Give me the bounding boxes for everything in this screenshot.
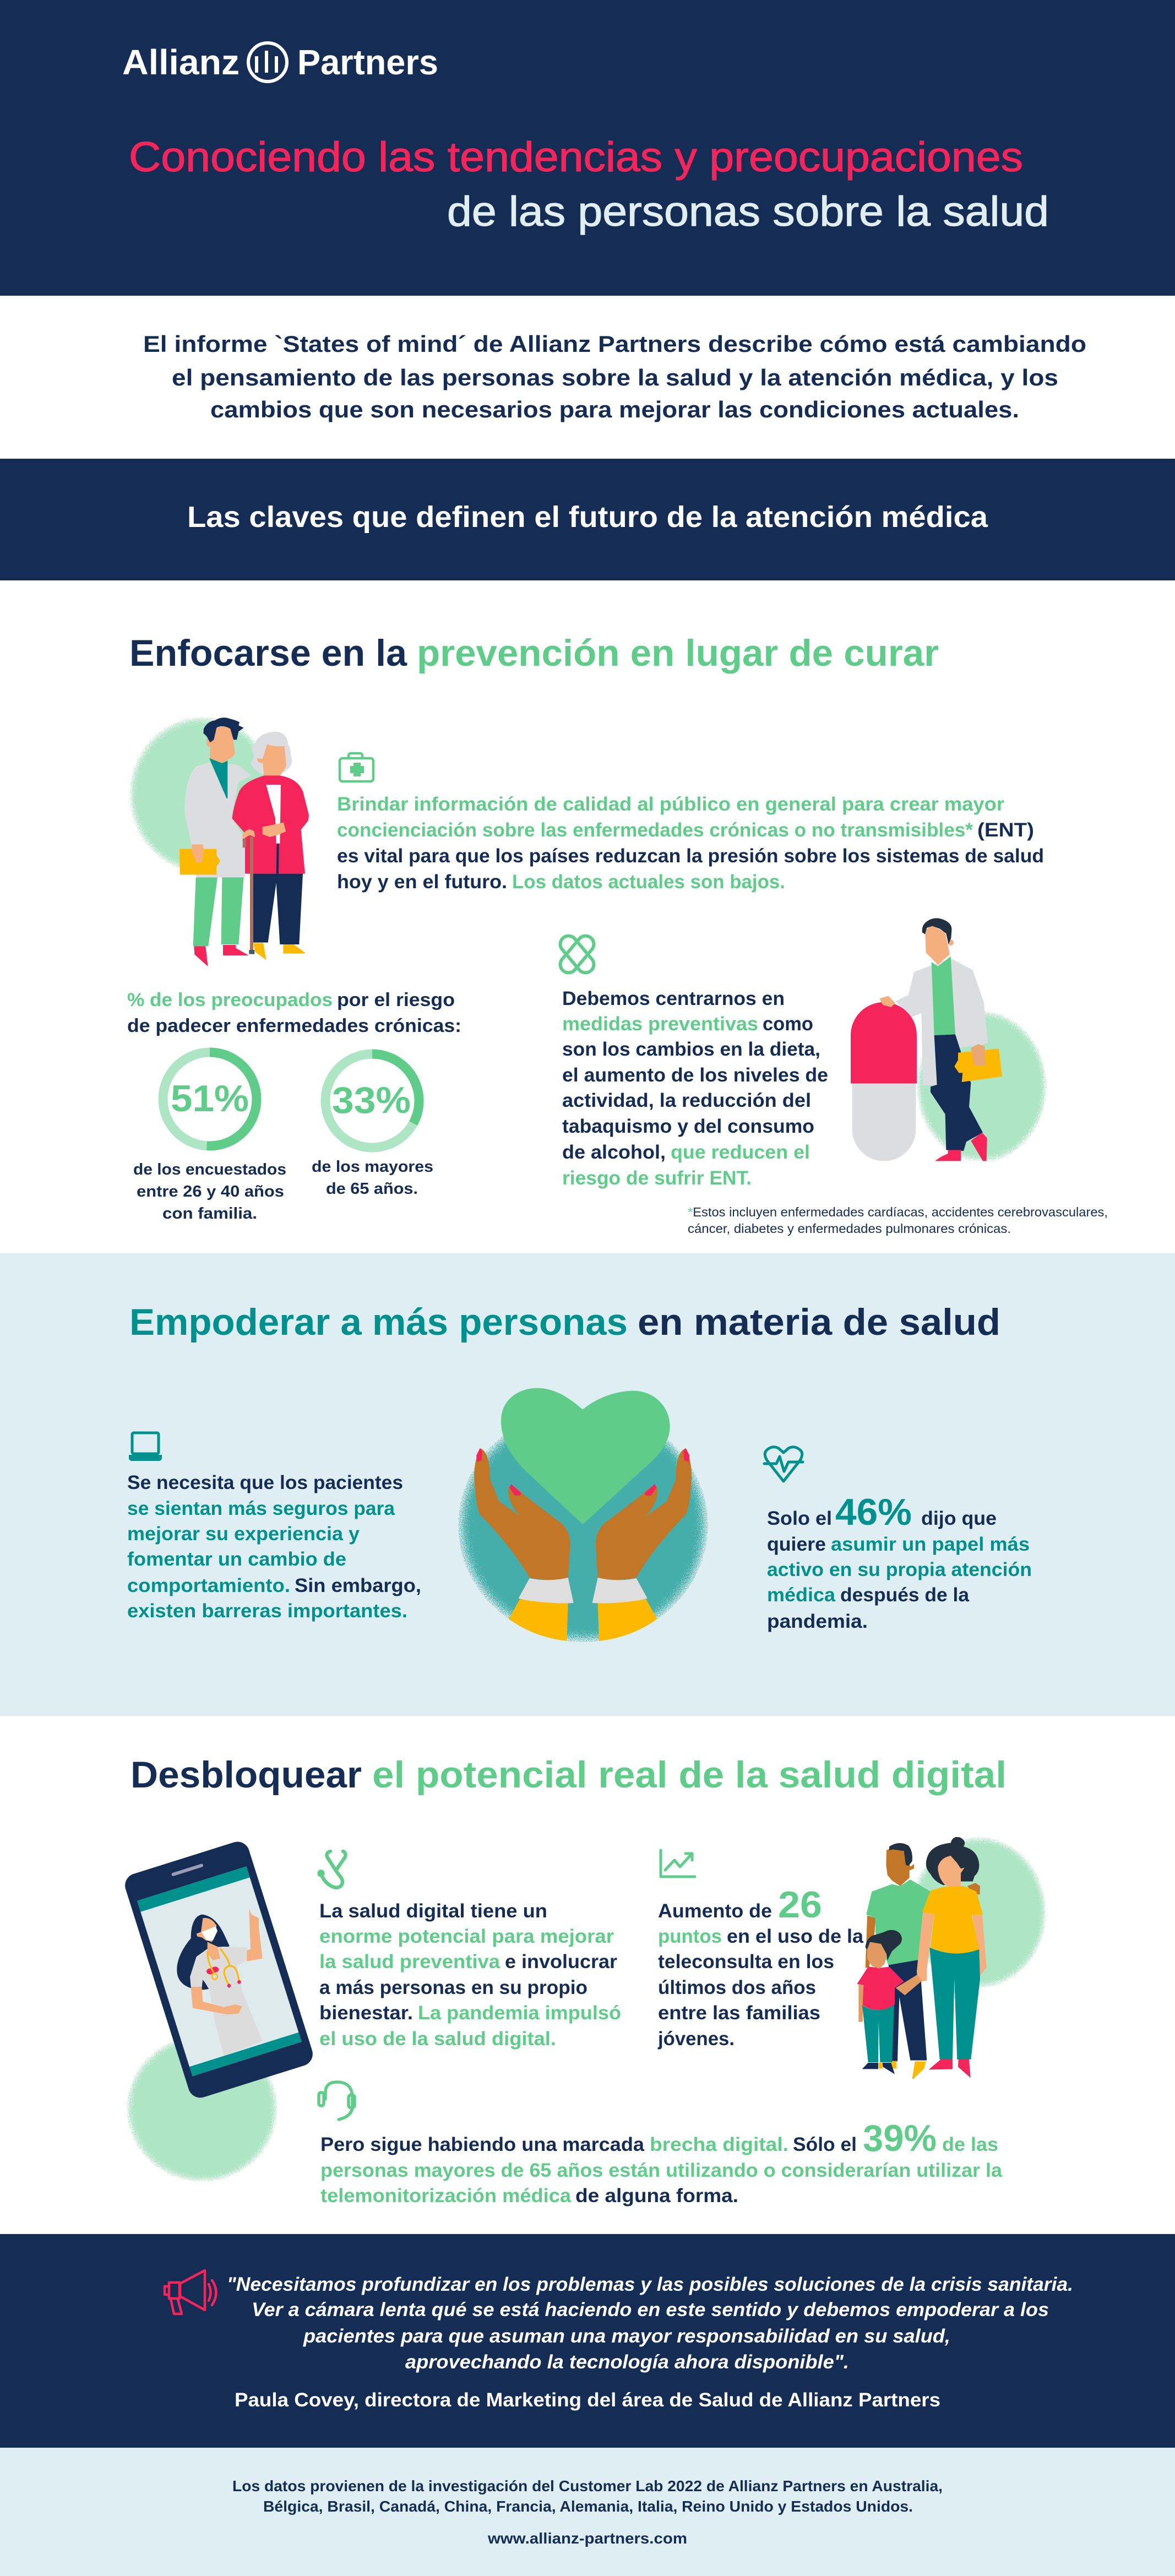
intro paragraph: cambios que son necesarios para mejorar las condiciones actuales. bbox=[210, 396, 1019, 422]
heading: prevención en lugar de curar bbox=[417, 632, 939, 674]
label: over 65: de 65 años. bbox=[326, 1180, 418, 1198]
text: digital health potential: la salud preventiva bbox=[319, 1951, 501, 1972]
text: 46 percent: asumir un papel más bbox=[831, 1534, 1030, 1555]
heading bbox=[129, 1301, 1000, 1343]
text: 46 percent: activo en su propia atención bbox=[767, 1559, 1032, 1580]
text: 26 points: 26 bbox=[778, 1884, 822, 1926]
text: patients confidence bbox=[127, 1472, 421, 1622]
text: 46 percent: médica bbox=[767, 1584, 836, 1606]
panel: footer bbox=[0, 2448, 1175, 2576]
heading: Empoderar a más personas bbox=[129, 1301, 628, 1343]
text: patients confidence: Sin embargo, bbox=[295, 1575, 421, 1596]
text: public information: es vital para que los países reduzcan la presión sobre los sistemas de salud bbox=[337, 845, 1044, 867]
quote text: pacientes para que asuman una mayor responsabilidad en su salud, bbox=[303, 2325, 950, 2347]
text: public information: Brindar información de calidad al público en general para crear mayor bbox=[337, 794, 1004, 815]
text: public information: hoy y en el futuro. bbox=[337, 871, 507, 893]
title bbox=[129, 134, 1049, 235]
footnote: *Estos incluyen enfermedades cardíacas, accidentes cerebrovasculares, bbox=[688, 1205, 1108, 1219]
label: 26 to 40 with family: de los encuestados bbox=[133, 1161, 286, 1178]
text: 46 percent: 46% bbox=[835, 1491, 912, 1533]
text: digital gap: brecha digital. bbox=[650, 2134, 788, 2155]
panel: quote bbox=[0, 2234, 1175, 2448]
text: preventive measures: riesgo de sufrir ENT. bbox=[562, 1167, 752, 1189]
text: preventive measures: que reducen el bbox=[671, 1142, 810, 1163]
label: 26 to 40 with family: entre 26 y 40 años bbox=[137, 1183, 284, 1200]
text: preventive measures: el aumento de los niveles de bbox=[562, 1064, 828, 1086]
label: 26 to 40 with family: con familia. bbox=[162, 1205, 257, 1222]
logo: Allianz Partners bbox=[122, 42, 438, 82]
footnote bbox=[688, 1205, 1108, 1236]
illustration: family bbox=[857, 1837, 1046, 2079]
label: over 65: de los mayores bbox=[312, 1158, 433, 1176]
intro paragraph: El informe `States of mind´ de Allianz Partners describe cómo está cambiando bbox=[143, 331, 1086, 357]
heading: Enfocarse en la bbox=[129, 632, 407, 674]
quote text bbox=[227, 2274, 1073, 2373]
text: 46 percent: quiere bbox=[767, 1534, 826, 1555]
heading: Desbloquear bbox=[130, 1754, 362, 1796]
text: 26 points bbox=[657, 1884, 864, 2050]
text: digital gap: personas mayores de 65 años están utilizando o considerarían utilizar la bbox=[320, 2160, 1003, 2181]
panel: header bbox=[0, 0, 1175, 296]
heading bbox=[130, 1754, 1007, 1796]
panel: digital health bbox=[122, 1754, 1046, 2207]
icon: stethoscope bbox=[319, 1851, 346, 1888]
text: preventive measures: actividad, la reducción del bbox=[562, 1090, 811, 1111]
text: worry about chronic disease: % de los preocupados bbox=[127, 990, 333, 1010]
icon: bandage bbox=[557, 932, 597, 976]
text: 26 points: entre las familias bbox=[658, 2002, 820, 2024]
text: public information: concienciación sobre las enfermedades crónicas o no transmisibles* bbox=[337, 819, 973, 841]
text: worry about chronic disease: de padecer enfermedades crónicas: bbox=[127, 1015, 461, 1036]
text: digital gap: Pero sigue habiendo una marcada bbox=[320, 2134, 645, 2155]
quote attribution: Paula Covey, directora de Marketing del área de Salud de Allianz Partners bbox=[235, 2389, 940, 2411]
text: preventive measures: son los cambios en la dieta, bbox=[562, 1039, 820, 1060]
donut chart: 33%: 33% bbox=[332, 1079, 411, 1121]
text: patients confidence: fomentar un cambio de bbox=[127, 1548, 346, 1570]
text: digital gap: de alguna forma. bbox=[575, 2185, 738, 2207]
website: www.allianz-partners.com bbox=[487, 2530, 687, 2547]
heading bbox=[129, 632, 939, 674]
text: digital health potential bbox=[319, 1900, 621, 2050]
icon: laptop bbox=[129, 1433, 162, 1461]
text: digital gap: Sólo el bbox=[793, 2134, 857, 2155]
icon: headset bbox=[319, 2082, 355, 2120]
text: patients confidence: comportamiento. bbox=[127, 1575, 290, 1596]
panel: section banner: Las claves que definen el futuro de la atención médica bbox=[187, 501, 988, 534]
title: Conociendo las tendencias y preocupaciones bbox=[129, 134, 1023, 181]
label: 26 to 40 with family bbox=[133, 1161, 286, 1222]
donut chart: 51%: 51% bbox=[171, 1078, 249, 1119]
text: 46 percent: pandemia. bbox=[767, 1611, 868, 1632]
title: de las personas sobre la salud bbox=[447, 188, 1049, 235]
text: digital gap: telemonitorización médica bbox=[320, 2185, 572, 2207]
donut chart: 33% bbox=[325, 1054, 419, 1148]
text: preventive measures: medidas preventivas bbox=[562, 1013, 758, 1035]
text: patients confidence: Se necesita que los pacientes bbox=[127, 1472, 403, 1493]
text: 46 percent: dijo que bbox=[921, 1508, 997, 1529]
quote text: Ver a cámara lenta qué se está haciendo en este sentido y debemos empoderar a los bbox=[252, 2299, 1049, 2320]
logo: Allianz Partners: Partners bbox=[297, 42, 438, 82]
text: 46 percent: después de la bbox=[840, 1584, 970, 1606]
text: worry about chronic disease: por el riesgo bbox=[337, 990, 455, 1010]
text: digital gap: 39% bbox=[863, 2117, 937, 2159]
text: 26 points: en el uso de la bbox=[727, 1926, 864, 1947]
label: over 65 bbox=[312, 1158, 433, 1198]
heading: el potencial real de la salud digital bbox=[372, 1754, 1007, 1796]
donut chart: 51% bbox=[163, 1052, 257, 1146]
heading: en materia de salud bbox=[638, 1301, 1000, 1343]
text: digital health potential: a más personas en su propio bbox=[319, 1977, 588, 1998]
data source note bbox=[232, 2477, 943, 2515]
text: patients confidence: se sientan más seguros para bbox=[127, 1498, 395, 1519]
text: patients confidence: existen barreras importantes. bbox=[127, 1600, 407, 1622]
text: digital gap: de las bbox=[942, 2134, 998, 2155]
quote text: aprovechando la tecnología ahora disponible". bbox=[405, 2351, 849, 2373]
text: 46 percent bbox=[767, 1491, 1032, 1632]
illustration: doctor leaning on pill bbox=[851, 918, 1047, 1162]
text: 26 points: puntos bbox=[658, 1926, 722, 1947]
text: digital health potential: La pandemia impulsó bbox=[418, 2002, 621, 2024]
data source note: Los datos provienen de la investigación del Customer Lab 2022 de Allianz Partners en Australia, bbox=[232, 2477, 943, 2495]
text: preventive measures: como bbox=[763, 1013, 813, 1035]
text: preventive measures: Debemos centrarnos en bbox=[562, 988, 785, 1009]
text: patients confidence: mejorar su experiencia y bbox=[127, 1523, 360, 1545]
text: 26 points: últimos dos años bbox=[658, 1977, 816, 1998]
footnote: cáncer, diabetes y enfermedades pulmonares crónicas. bbox=[688, 1221, 1011, 1236]
panel: empowerment bbox=[0, 1253, 1175, 1716]
text: public information: Los datos actuales son bajos. bbox=[512, 871, 785, 893]
icon: medical kit bbox=[340, 753, 373, 781]
panel: section banner bbox=[0, 459, 1175, 580]
intro paragraph: el pensamiento de las personas sobre la salud y la atención médica, y los bbox=[172, 365, 1058, 390]
illustration: hands holding heart bbox=[458, 1388, 708, 1642]
text: 46 percent: Solo el bbox=[767, 1508, 832, 1529]
text: digital health potential: enorme potencial para mejorar bbox=[319, 1926, 614, 1947]
text: digital health potential: bienestar. bbox=[319, 2002, 413, 2024]
text: worry about chronic disease bbox=[127, 990, 461, 1036]
icon: line chart bbox=[661, 1850, 695, 1877]
text: 26 points: jóvenes. bbox=[657, 2028, 735, 2050]
illustration: doctor and elderly woman bbox=[129, 717, 309, 966]
icon: heart with pulse bbox=[764, 1447, 803, 1481]
data source note: Bélgica, Brasil, Canadá, China, Francia, Alemania, Italia, Reino Unido y Estados Unidos. bbox=[263, 2498, 913, 2515]
text: 26 points: Aumento de bbox=[658, 1900, 772, 1922]
text: digital health potential: e involucrar bbox=[505, 1951, 617, 1972]
logo: Allianz Partners: Allianz bbox=[122, 42, 240, 82]
illustration: phone with doctor bbox=[122, 1839, 315, 2182]
text: public information: (ENT) bbox=[977, 819, 1034, 841]
text: preventive measures bbox=[562, 988, 828, 1189]
quote text: "Necesitamos profundizar en los problemas y las posibles soluciones de la crisis sanitaria. bbox=[227, 2274, 1073, 2295]
intro paragraph bbox=[143, 331, 1086, 422]
text: 26 points: teleconsulta en los bbox=[658, 1951, 834, 1972]
text: preventive measures: tabaquismo y del consumo bbox=[562, 1116, 814, 1137]
icon: megaphone bbox=[165, 2270, 216, 2314]
text: preventive measures: de alcohol, bbox=[562, 1142, 666, 1163]
text: digital health potential: el uso de la salud digital. bbox=[319, 2028, 556, 2050]
text: public information bbox=[337, 794, 1044, 893]
panel: prevention bbox=[127, 632, 1108, 1236]
text: digital gap bbox=[320, 2117, 1003, 2207]
text: digital health potential: La salud digital tiene un bbox=[319, 1900, 547, 1922]
